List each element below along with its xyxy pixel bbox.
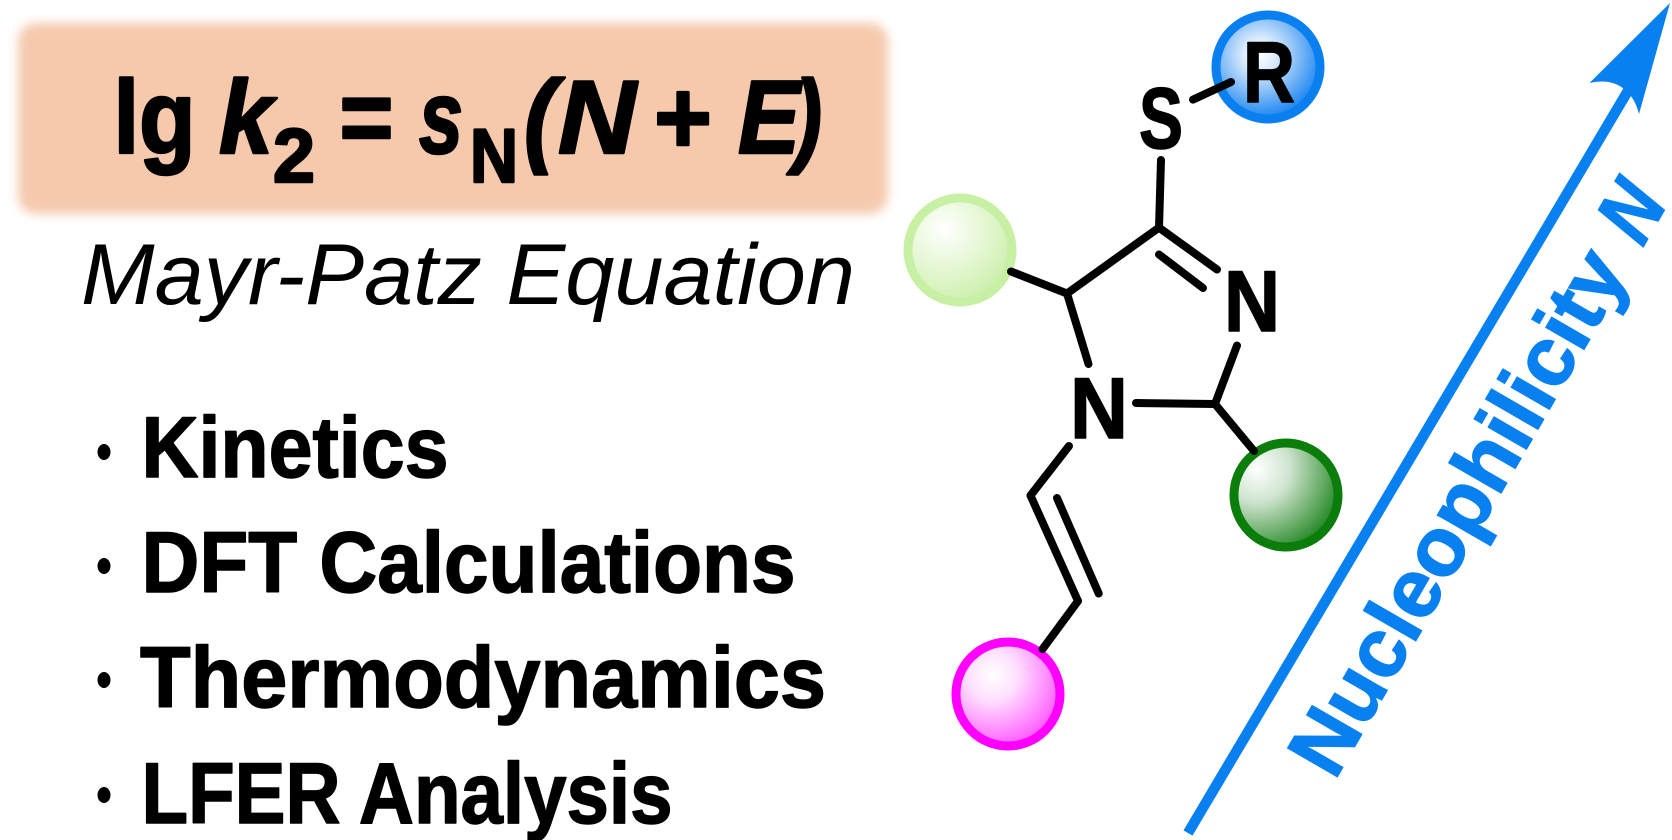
bullet list — [98, 400, 826, 840]
equation: ) — [786, 60, 822, 176]
equation: ( — [524, 60, 566, 176]
molecule: imidazoline core — [908, 15, 1338, 746]
equation: s — [419, 60, 463, 176]
atom labels: N — [1224, 254, 1280, 350]
bonds — [1011, 82, 1254, 649]
atom labels: N — [1070, 361, 1128, 457]
equation: N — [558, 60, 638, 176]
equation: k — [219, 60, 278, 176]
arrow: increasing nucleophilicity — [1188, 3, 1670, 833]
axis label: Nucleophilicity N: Nucleophilicity — [1270, 233, 1645, 790]
equation: + — [654, 60, 712, 176]
bullet: Thermodynamics: Thermodynamics — [140, 630, 826, 726]
substituent: dark green sphere — [1234, 443, 1338, 547]
bullet: DFT Calculations: DFT Calculations — [142, 515, 796, 611]
equation: = — [340, 60, 394, 176]
bullet: Kinetics: Kinetics — [142, 400, 448, 496]
atom labels: S — [1139, 71, 1183, 167]
bullet: LFER Analysis: LFER Analysis — [142, 746, 672, 840]
equation: E — [738, 60, 802, 176]
substituent: lime sphere — [908, 198, 1012, 302]
equation: 2 — [273, 114, 315, 199]
substituent: blue sphere R — [1216, 15, 1320, 119]
equation: N — [470, 114, 518, 199]
equation: lg — [114, 60, 196, 176]
substituent: magenta sphere — [956, 642, 1060, 746]
equation — [114, 60, 822, 199]
atom labels — [1070, 25, 1295, 457]
atom labels: R — [1243, 25, 1295, 121]
subtitle: Mayr-Patz Equation: Mayr-Patz Equation — [81, 227, 855, 323]
panel: Mayr-Patz equation — [18, 23, 888, 214]
